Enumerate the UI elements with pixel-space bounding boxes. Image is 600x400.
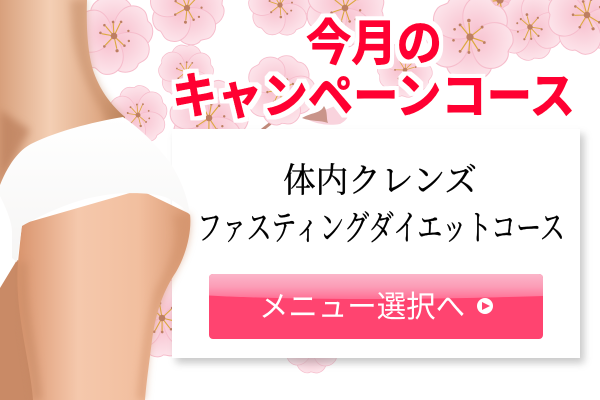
thigh xyxy=(17,190,190,400)
torso xyxy=(0,0,125,195)
cherry blossom branches xyxy=(262,0,470,130)
menu button xyxy=(209,274,543,339)
title line 1: 今月の xyxy=(306,17,442,71)
white card panel xyxy=(172,129,580,358)
course name line 1: 体内クレンズ xyxy=(283,162,477,200)
white underwear xyxy=(0,117,190,262)
card shadow xyxy=(176,134,584,363)
title line 2: キャンペーンコース xyxy=(172,70,575,124)
back leg xyxy=(0,260,35,400)
flower bud xyxy=(302,103,349,125)
button label: メニュー選択へ xyxy=(259,291,465,324)
icon: play arrow xyxy=(477,298,493,314)
title xyxy=(172,17,575,124)
body figure xyxy=(0,0,190,400)
